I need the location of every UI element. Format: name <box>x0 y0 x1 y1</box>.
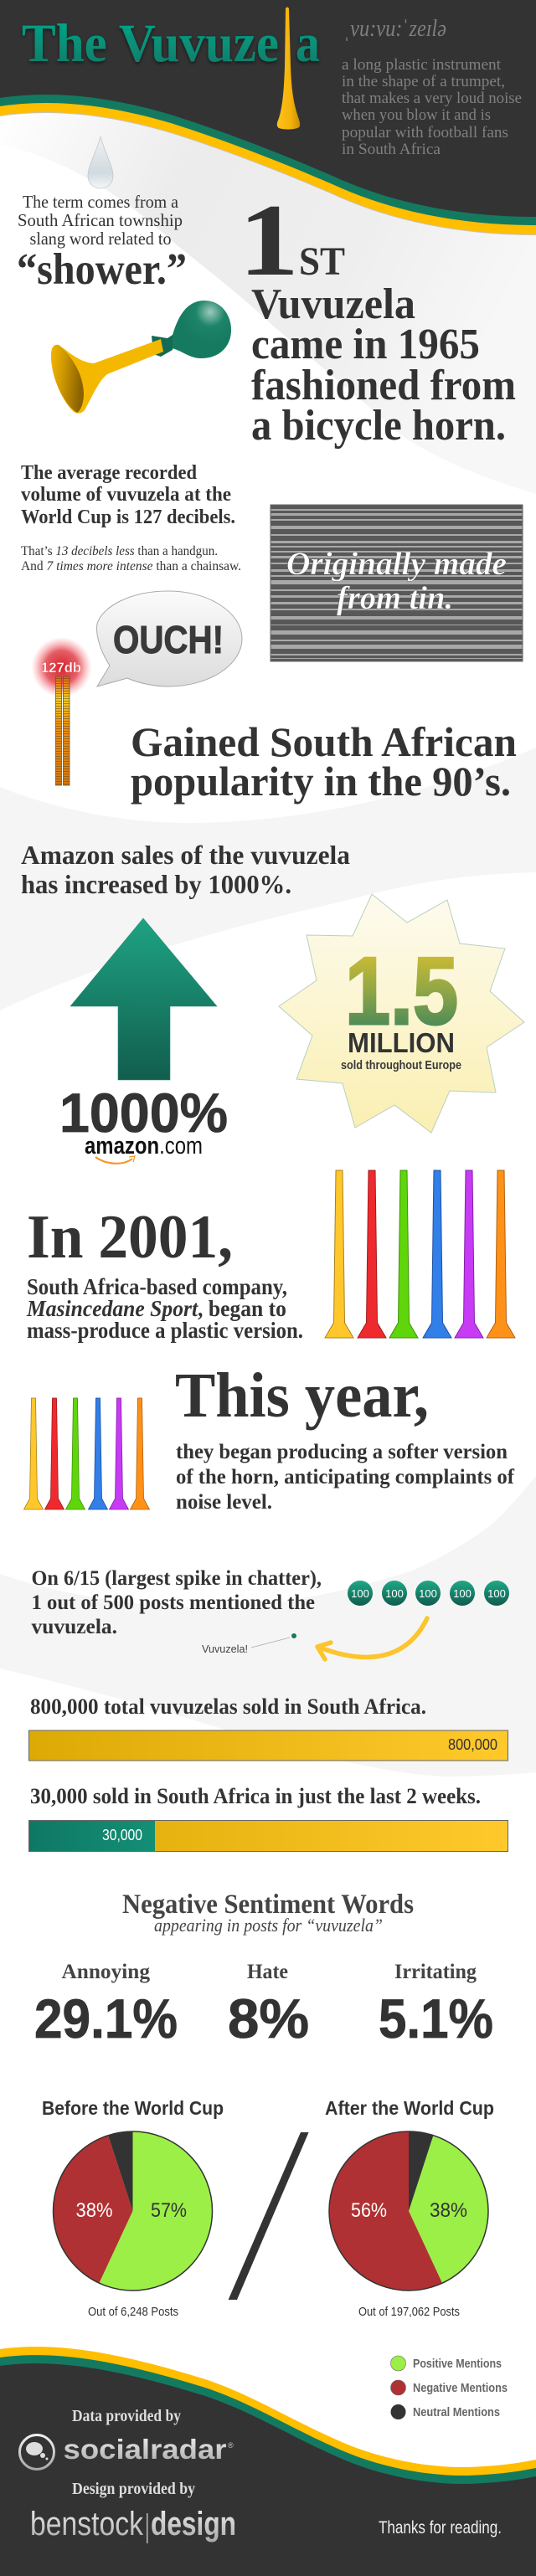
text: term origin: “shower.” <box>17 245 187 294</box>
stat: hate: Hate <box>247 1961 288 1983</box>
icon: six vuvuzelas small <box>23 1398 149 1509</box>
definition: in South Africa <box>342 141 441 158</box>
icon: title vuvuzela <box>277 7 300 129</box>
stat: hate: 8% <box>228 1987 309 2049</box>
icon: 100 coins: 100 <box>453 1587 472 1600</box>
icon: 100 coins: 100 <box>487 1587 506 1600</box>
heading: in 2001: mass-produce a plastic version. <box>27 1318 303 1343</box>
stat: annoying: Annoying <box>62 1961 150 1983</box>
header band <box>0 0 536 235</box>
stat: annoying <box>34 1961 178 2049</box>
text: amazon sales: Amazon sales of the vuvuzela <box>21 840 350 870</box>
heading: south african popularity: Gained South African <box>131 718 517 765</box>
icon: decibel meter: 127db <box>41 660 81 676</box>
icon: bicycle horn <box>51 301 231 414</box>
pronunciation: ˌvu:vu:ˈzeɪlə <box>343 15 446 42</box>
title: The Vuvuze <box>22 13 279 74</box>
legend: Neutral Mentions <box>413 2405 500 2419</box>
icon: 100 coins: 100 <box>351 1587 369 1600</box>
callout: 1.5 million star <box>279 894 524 1133</box>
text: thanks for reading: Thanks for reading. <box>379 2518 502 2537</box>
text: data provided by: Data provided by <box>72 2407 181 2425</box>
stat: 1000%: 1000% <box>59 1082 228 1144</box>
pie chart: after the world cup <box>325 2097 494 2319</box>
bar chart: 800,000: 800,000 total vuvuzelas sold in South Africa. <box>30 1694 426 1719</box>
icon: decibel meter <box>32 637 92 785</box>
heading: this year: they began producing a softer version <box>176 1441 508 1463</box>
callout: ouch bubble <box>97 591 242 686</box>
text: 1st vuvuzela: ST <box>299 239 345 284</box>
arrow: curved yellow <box>317 1618 427 1659</box>
logo: benstock design <box>30 2506 236 2543</box>
definition: in the shape of a trumpet, <box>342 73 505 90</box>
pie chart: before the world cup: 57% <box>151 2199 187 2222</box>
text: 1st vuvuzela <box>239 183 516 450</box>
pie chart: before the world cup: Out of 6,248 Posts <box>88 2305 178 2319</box>
text: originally made from tin: from tin. <box>337 580 453 616</box>
text: average volume: And 7 times more intense than a chainsaw. <box>21 559 241 573</box>
text: 1st vuvuzela: a bicycle horn. <box>251 402 506 450</box>
bar chart: 30,000: 30,000 <box>102 1827 142 1843</box>
definition: when you blow it and is <box>342 106 491 124</box>
heading: negative sentiment words: Negative Sentiment Words <box>122 1890 414 1920</box>
text: average volume: That’s 13 decibels less than a handgun. <box>21 544 218 558</box>
pie chart: after the world cup: Out of 197,062 Posts <box>358 2305 460 2319</box>
divider slash <box>229 2132 309 2300</box>
heading: in 2001: Masincedane Sport, began to <box>26 1296 286 1321</box>
text: 1st vuvuzela: fashioned from <box>251 362 516 409</box>
callout: 1.5 million star: MILLION <box>348 1027 455 1058</box>
text: spike in chatter: vuvuzela. <box>32 1616 117 1638</box>
bar chart: 30,000 <box>28 1784 508 1852</box>
text: average volume <box>21 462 241 573</box>
heading: in 2001: South Africa-based company, <box>27 1274 287 1299</box>
logo: amazon: amazon.com <box>85 1133 203 1159</box>
pie chart: after the world cup: 38% <box>430 2199 467 2222</box>
footer band <box>0 2347 536 2576</box>
icon: water drop <box>88 136 113 188</box>
text: average volume: volume of vuvuzela at the <box>21 484 231 506</box>
text: 1st vuvuzela: 1 <box>239 183 299 297</box>
heading: negative sentiment words: appearing in posts for “vuvuzela” <box>154 1915 383 1936</box>
text: design provided by: Design provided by <box>72 2480 195 2498</box>
callout: 1.5 million star: sold throughout Europe <box>341 1058 461 1072</box>
text: 1st vuvuzela: came in 1965 <box>251 321 480 368</box>
text: amazon sales: has increased by 1000%. <box>21 869 291 899</box>
definition <box>342 56 522 158</box>
icon: 100 coins: 100 <box>419 1587 437 1600</box>
heading: this year: noise level. <box>176 1491 272 1514</box>
callout: ouch bubble: OUCH! <box>113 618 224 661</box>
text: spike in chatter: 1 out of 500 posts mentioned the <box>32 1591 315 1614</box>
bar chart: 800,000: 800,000 <box>448 1736 497 1753</box>
icon: 100 coins: 100 <box>385 1587 404 1600</box>
stat: irritating: 5.1% <box>379 1987 493 2049</box>
text: average volume: The average recorded <box>21 462 198 484</box>
heading: this year: of the horn, anticipating complaints of <box>176 1466 515 1489</box>
callout: vuvuzela dot: Vuvuzela! <box>202 1643 248 1655</box>
text: spike in chatter <box>32 1567 322 1638</box>
logo: socialradar: ® <box>228 2441 234 2450</box>
heading: this year: This year, <box>175 1360 429 1431</box>
heading: south african popularity <box>131 718 517 805</box>
legend: Negative Mentions <box>413 2381 508 2395</box>
text: average volume: World Cup is 127 decibels. <box>21 506 235 528</box>
bar chart: 800,000 <box>28 1694 508 1761</box>
pie chart: before the world cup: Before the World Cup <box>42 2097 224 2119</box>
panel: tin <box>271 505 523 661</box>
definition: that makes a very loud noise <box>342 90 522 107</box>
logo: benstock design: design <box>151 2506 236 2543</box>
logo: socialradar <box>20 2434 234 2470</box>
legend <box>390 2356 508 2419</box>
pie chart: after the world cup: After the World Cup <box>325 2097 494 2119</box>
bar chart: 30,000: 30,000 sold in South Africa in just the last 2 weeks. <box>30 1784 481 1808</box>
stat: irritating: Irritating <box>394 1961 477 1983</box>
stat: annoying: 29.1% <box>34 1987 178 2049</box>
heading: in 2001 <box>26 1203 303 1343</box>
title: a <box>296 13 320 74</box>
definition: popular with football fans <box>342 124 508 141</box>
heading: south african popularity: popularity in the 90’s. <box>131 758 511 805</box>
callout: vuvuzela dot <box>202 1633 296 1655</box>
background swoosh: upper grey <box>0 109 536 494</box>
heading: in 2001: In 2001, <box>27 1203 233 1272</box>
pie chart: before the world cup: 38% <box>75 2199 112 2222</box>
icon: up arrow <box>70 918 217 1080</box>
definition: a long plastic instrument <box>342 56 502 74</box>
heading: negative sentiment words <box>122 1890 414 1936</box>
text: 1st vuvuzela: Vuvuzela <box>251 280 415 328</box>
icon: six vuvuzelas large <box>325 1170 515 1338</box>
callout: 1.5 million star: 1.5 <box>345 938 458 1045</box>
icon: 100 coins <box>348 1581 509 1606</box>
text: originally made from tin <box>286 546 507 616</box>
logo: socialradar: socialradar <box>64 2434 227 2465</box>
stat: irritating <box>379 1961 493 2049</box>
pie chart: after the world cup: 56% <box>351 2199 387 2222</box>
pie chart: before the world cup <box>42 2097 224 2319</box>
text: term origin: slang word related to <box>30 229 171 249</box>
stat: hate <box>228 1961 309 2049</box>
text: spike in chatter: On 6/15 (largest spike in chatter), <box>32 1567 322 1590</box>
text: amazon sales <box>21 840 350 899</box>
text: term origin: South African township <box>18 210 183 230</box>
legend: Positive Mentions <box>413 2357 502 2371</box>
background swoosh: middle grey <box>0 748 536 1010</box>
logo: benstock design: benstock <box>30 2506 144 2543</box>
text: term origin: The term comes from a <box>23 192 179 212</box>
heading: this year <box>175 1360 515 1514</box>
background swoosh: lower grey <box>0 1476 536 1776</box>
text: term origin <box>17 192 187 294</box>
text: originally made from tin: Originally made <box>286 546 507 582</box>
